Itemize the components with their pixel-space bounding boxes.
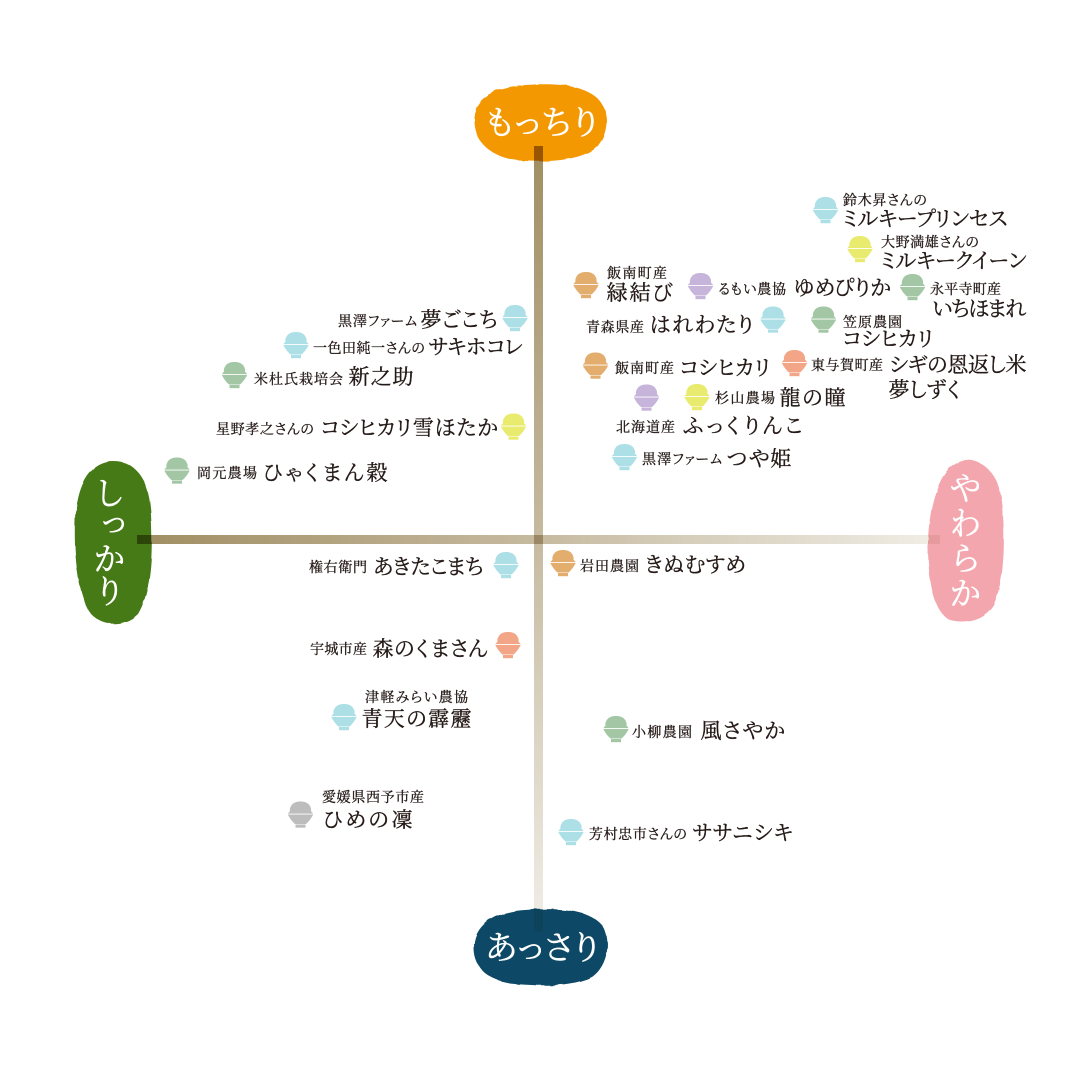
item: 風さやか: 小柳農園 — [632, 724, 692, 741]
label blob: もっちり: もっちり — [486, 106, 598, 142]
item: 緑結び: 飯南町産 — [607, 265, 667, 282]
item: 新之助: 新之助 — [348, 365, 414, 389]
item: シギの恩返し米 夢しずく: 夢しずく — [888, 378, 962, 402]
item: ササニシキ — [558, 819, 792, 845]
item: きぬむすめ: きぬむすめ — [644, 553, 746, 577]
item: 笠原農園 コシヒカリ: 笠原農園 — [843, 314, 902, 331]
item: 笠原農園 コシヒカリ — [811, 306, 934, 351]
item: ミルキークイーン: ミルキークイーン — [880, 249, 1026, 273]
label blob: しっかり: しっかり — [88, 476, 124, 607]
vertical axis: もっちり to あっさり — [534, 146, 543, 932]
item: ミルキークイーン — [847, 234, 1026, 273]
item: いちほまれ: いちほまれ — [932, 297, 1026, 321]
item: 龍の瞳: 龍の瞳 — [780, 386, 846, 410]
item: 風さやか — [603, 716, 784, 743]
item: シギの恩返し米 夢しずく: シギの恩返し米 — [890, 353, 1026, 377]
item: 新之助: 米杜氏栽培会 — [254, 371, 343, 388]
item: 笠原農園 コシヒカリ: コシヒカリ — [842, 327, 934, 351]
item: サキホコレ: サキホコレ — [428, 335, 523, 359]
item: 緑結び: 緑結び — [606, 281, 673, 305]
item: 飯南町産 コシヒカリ: コシヒカリ — [680, 356, 770, 380]
item: ミルキープリンセス — [813, 192, 1008, 231]
item: 飯南町産 コシヒカリ: 飯南町産 — [615, 360, 674, 377]
item: ふっくりんこ: ふっくりんこ — [684, 414, 802, 438]
item: 青天の霹靂: 青天の霹靂 — [362, 707, 472, 731]
item: 森のくまさん — [310, 632, 521, 661]
label blob: やわらか — [928, 460, 1004, 621]
item: あきたこまち — [309, 552, 519, 579]
label blob: やわらか: やわらか — [944, 471, 980, 609]
item: きぬむすめ: 岩田農園 — [580, 558, 639, 575]
item: 夢ごこち: 夢ごこち — [420, 308, 498, 332]
item: ゆめぴりか — [688, 273, 890, 300]
item: つや姫: つや姫 — [726, 447, 792, 471]
item: 飯南町産 コシヒカリ — [583, 352, 770, 380]
item: ササニシキ: 芳村忠市さんの — [589, 826, 687, 843]
item: 青天の霹靂: 津軽みらい農協 — [365, 689, 468, 706]
item: ふっくりんこ — [616, 384, 802, 438]
item: はれわたり: はれわたり — [650, 313, 754, 337]
item: シギの恩返し米 夢しずく — [782, 350, 1026, 402]
item: サキホコレ — [283, 332, 523, 359]
item: 龍の瞳: 杉山農場 — [715, 390, 775, 407]
item: コシヒカリ雪ほたか: コシヒカリ雪ほたか — [320, 416, 498, 440]
item: ひゃくまん穀 — [164, 458, 388, 485]
item: ひめの凜: 愛媛県西予市産 — [322, 789, 424, 806]
item: あきたこまち: あきたこまち — [374, 555, 484, 579]
item: コシヒカリ雪ほたか: 星野孝之さんの — [216, 421, 314, 438]
label blob: あっさり: あっさり — [486, 931, 599, 967]
item: 夢ごこち — [338, 305, 528, 332]
item: ササニシキ: ササニシキ — [692, 821, 792, 845]
item: 緑結び — [573, 265, 673, 305]
item: ミルキープリンセス: ミルキープリンセス — [842, 207, 1008, 231]
item: 新之助 — [222, 362, 414, 389]
item: シギの恩返し米 夢しずく: 東与賀町産 — [811, 357, 883, 374]
item: いちほまれ: 永平寺町産 — [930, 281, 1001, 298]
item: ゆめぴりか: ゆめぴりか — [794, 276, 890, 300]
item: ひゃくまん穀: ひゃくまん穀 — [264, 461, 388, 485]
item: ミルキークイーン: 大野満雄さんの — [881, 234, 979, 251]
item: コシヒカリ雪ほたか — [216, 414, 526, 440]
horizontal axis: しっかり to やわらか — [137, 535, 940, 544]
item: いちほまれ — [900, 274, 1026, 321]
item: ひゃくまん穀: 岡元農場 — [197, 465, 257, 482]
item: ひめの凜 — [288, 789, 424, 832]
item: 青天の霹靂 — [331, 689, 472, 731]
item: 森のくまさん: 森のくまさん — [372, 637, 488, 661]
item: はれわたり — [586, 306, 786, 337]
item: 夢ごこち: 黒澤ファーム — [338, 314, 417, 330]
item: 龍の瞳 — [684, 384, 846, 410]
item: サキホコレ: 一色田純一さんの — [313, 341, 425, 357]
label blob: しっかり — [75, 461, 152, 624]
item: つや姫: 黒澤ファーム — [642, 452, 722, 468]
label blob: もっちり — [474, 84, 606, 161]
item: ミルキープリンセス: 鈴木昇さんの — [843, 192, 927, 209]
item: ひめの凜: ひめの凜 — [324, 808, 412, 832]
item: ふっくりんこ: 北海道産 — [616, 420, 675, 436]
item: 森のくまさん: 宇城市産 — [310, 641, 367, 658]
item: ゆめぴりか: るもい農協 — [718, 281, 786, 298]
item: あきたこまち: 権右衛門 — [309, 559, 367, 576]
label blob: あっさり — [474, 909, 607, 985]
item: はれわたり: 青森県産 — [586, 319, 644, 336]
item: 風さやか: 風さやか — [700, 719, 784, 743]
item: つや姫 — [612, 444, 792, 471]
item: きぬむすめ — [550, 550, 746, 577]
